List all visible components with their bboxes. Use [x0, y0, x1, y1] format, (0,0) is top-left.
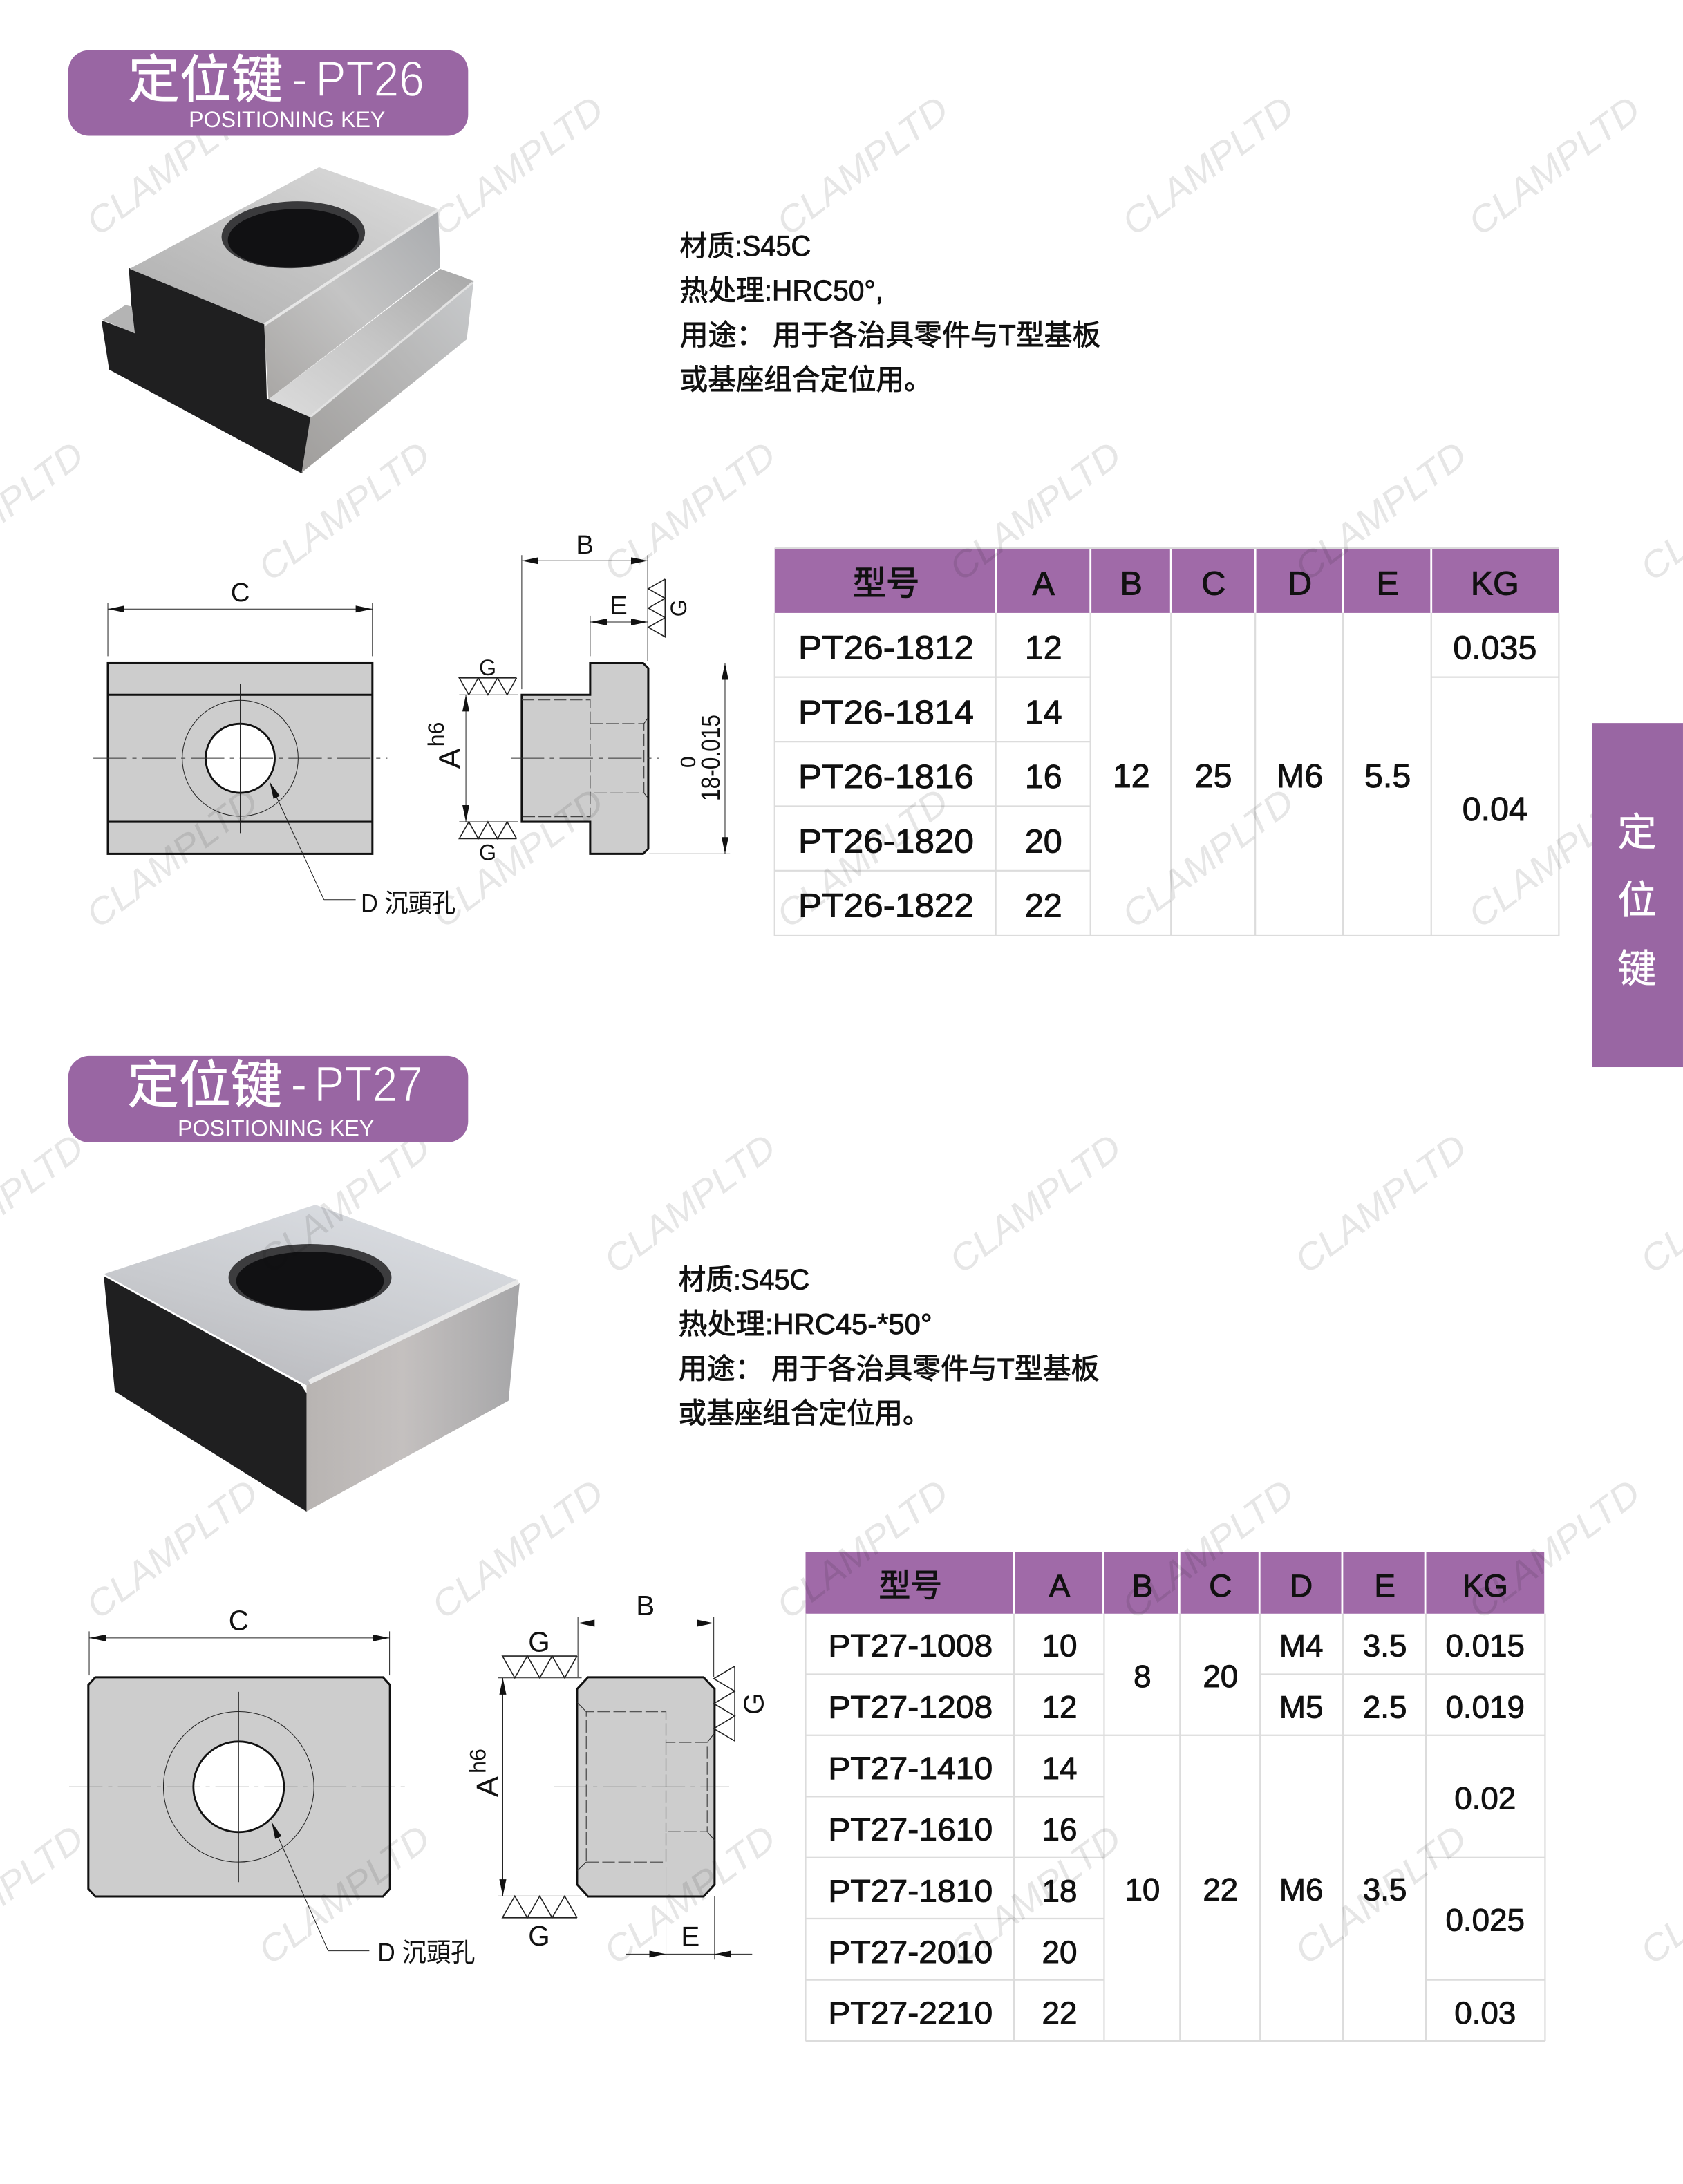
table: PT27 specifications: 20	[1042, 1934, 1077, 1970]
table: PT27 specifications: 0.015	[1445, 1628, 1525, 1664]
drawing: PT26 front view: D 沉頭孔	[361, 888, 455, 917]
watermark grid: CLAMPLTD	[251, 1818, 438, 1973]
watermark grid: CLAMPLTD	[251, 1127, 438, 1281]
side tab: 键	[1617, 947, 1657, 990]
table: PT27 specifications: 20	[1203, 1659, 1238, 1694]
drawing: PT26 side view: h6	[424, 722, 449, 746]
text block: PT26 description: 热处理:HRC50°,	[680, 274, 883, 306]
table: PT27 specifications: 2.5	[1363, 1689, 1407, 1724]
table: PT27 specifications: 22	[1042, 1995, 1077, 2031]
drawing: PT26 side view: B	[576, 530, 594, 560]
table: PT26 specifications: PT26-1820	[798, 823, 974, 860]
text block: PT26 description	[680, 230, 1100, 395]
table: PT27 specifications: M5	[1279, 1689, 1323, 1724]
table: PT26 specifications: C	[1201, 565, 1225, 603]
table: PT27 specifications: D	[1290, 1568, 1313, 1603]
watermark grid: CLAMPLTD	[596, 434, 783, 589]
drawing: PT27 side view: h6	[465, 1749, 490, 1773]
side tab: 位	[1617, 878, 1657, 921]
table: PT26 specifications: A	[1033, 565, 1055, 603]
table: PT26 specifications: 14	[1025, 694, 1062, 731]
heading banner: PT26: 定位键	[128, 50, 283, 109]
table: PT27 specifications: 10	[1042, 1628, 1077, 1664]
watermark grid: CLAMPLTD	[1115, 781, 1301, 936]
text block: PT27 description: 材质:S45C	[679, 1264, 809, 1296]
table: PT27 specifications: PT27-2210	[828, 1995, 993, 2031]
watermark grid: CLAMPLTD	[1461, 1472, 1648, 1627]
table: PT27 specifications: 12	[1042, 1689, 1077, 1724]
watermark grid: CLAMPLTD	[424, 1472, 612, 1627]
watermark grid: CLAMPLTD	[596, 1818, 783, 1973]
table: PT26 specifications: E	[1377, 565, 1399, 603]
table: PT27 specifications: E	[1374, 1568, 1395, 1603]
table: PT26 specifications: 20	[1025, 823, 1062, 860]
table: PT27 specifications: PT27-1810	[828, 1873, 993, 1908]
drawing: PT26 side view: 18-0.015	[696, 715, 726, 801]
heading banner: PT26	[68, 50, 468, 136]
drawing: PT27 side view: G	[739, 1693, 770, 1715]
table: PT27 specifications: 16	[1042, 1812, 1077, 1847]
heading banner: PT27	[68, 1055, 468, 1142]
watermark grid: CLAMPLTD	[1115, 1472, 1301, 1627]
heading banner: PT26: POSITIONING KEY	[189, 107, 385, 132]
drawing: PT26 side view: G	[479, 655, 496, 680]
table: PT26 specifications: 12	[1113, 757, 1150, 795]
drawing: PT26 side view: G	[479, 840, 496, 865]
heading banner: PT27: 定位键	[127, 1055, 282, 1113]
watermark grid: CLAMPLTD	[79, 781, 266, 936]
table: PT26 specifications: 0.04	[1463, 791, 1527, 828]
table: PT26 specifications: 5.5	[1364, 757, 1411, 795]
table: PT26 specifications: 型号	[853, 565, 919, 603]
table: PT26 specifications: KG	[1471, 565, 1519, 603]
table: PT27 specifications: M6	[1279, 1872, 1323, 1907]
watermark grid: CLAMPLTD	[424, 88, 612, 243]
watermark grid: CLAMPLTD	[942, 434, 1129, 589]
table: PT27 specifications: 3.5	[1363, 1628, 1407, 1664]
table: PT27 specifications: M4	[1279, 1628, 1323, 1664]
table: PT27 specifications	[805, 1552, 1545, 2041]
heading banner: PT26: -	[291, 51, 308, 107]
watermark grid: CLAMPLTD	[942, 1818, 1129, 1973]
table: PT26 specifications: PT26-1816	[798, 758, 974, 796]
drawing: PT26 side view: 0	[677, 756, 700, 768]
drawing: PT26 side view: E	[610, 591, 628, 621]
table: PT27 specifications: 0.025	[1445, 1903, 1525, 1938]
watermark grid: CLAMPLTD	[1461, 781, 1648, 936]
table: PT27 specifications: C	[1209, 1568, 1232, 1603]
3D model: PT26 T-slot key	[102, 167, 473, 473]
watermark grid: CLAMPLTD	[251, 434, 438, 589]
watermark grid: CLAMPLTD	[1288, 1818, 1474, 1973]
text block: PT27 description: 热处理:HRC45-*50°	[679, 1308, 932, 1340]
table: PT26 specifications: M6	[1277, 757, 1323, 795]
table: PT26 specifications: 0.035	[1453, 629, 1536, 666]
table: PT26 specifications: B	[1120, 565, 1143, 603]
side tab: 定	[1617, 811, 1657, 854]
heading banner: PT27: -	[290, 1057, 307, 1113]
drawing: PT27 side view: B	[636, 1590, 655, 1621]
table: PT27 specifications: PT27-2010	[828, 1934, 993, 1970]
watermark grid: CLAMPLTD	[1288, 1127, 1474, 1281]
watermark grid: CLAMPLTD	[769, 781, 956, 936]
table: PT27 specifications: KG	[1463, 1568, 1508, 1603]
watermark grid: CLAMPLTD	[596, 1127, 783, 1281]
text block: PT26 description: 或基座组合定位用。	[680, 364, 932, 395]
table: PT27 specifications: A	[1049, 1568, 1071, 1603]
table: PT27 specifications: PT27-1008	[828, 1628, 993, 1664]
table: PT27 specifications: 0.02	[1454, 1780, 1516, 1816]
drawing: PT26 side view: A	[433, 748, 467, 769]
drawing: PT27 front view	[69, 1605, 475, 1968]
watermark grid: CLAMPLTD	[1461, 88, 1648, 243]
text block: PT26 description: 材质:S45C	[680, 230, 811, 262]
drawing: PT27 front view: D 沉頭孔	[377, 1938, 475, 1968]
table: PT26 specifications: PT26-1822	[798, 887, 974, 924]
drawing: PT27 side view: A	[471, 1776, 505, 1797]
3D model: PT27 square key	[104, 1205, 520, 1512]
text block: PT26 description: 用途： 用于各治具零件与T型基板	[680, 319, 1100, 351]
drawing: PT27 side view: G	[528, 1921, 550, 1952]
drawing: PT26 side view: G	[666, 599, 691, 616]
table: PT26 specifications: 16	[1025, 758, 1062, 796]
heading banner: PT27: PT27	[314, 1057, 423, 1113]
table: PT27 specifications: 型号	[879, 1568, 942, 1603]
watermark grid: CLAMPLTD	[769, 88, 956, 243]
side tab	[1592, 723, 1683, 1067]
table: PT27 specifications: 0.03	[1454, 1995, 1516, 2031]
watermark grid: CLAMPLTD	[942, 1127, 1129, 1281]
table: PT26 specifications: D	[1288, 565, 1312, 603]
text block: PT27 description: 或基座组合定位用。	[679, 1397, 931, 1429]
drawing: PT27 side view	[465, 1590, 770, 1959]
table: PT27 specifications: PT27-1410	[828, 1751, 993, 1786]
table: PT27 specifications: B	[1132, 1568, 1153, 1603]
table: PT27 specifications: 10	[1125, 1872, 1160, 1907]
table: PT27 specifications: 8	[1134, 1659, 1151, 1694]
table: PT26 specifications	[775, 548, 1559, 936]
heading banner: PT26: PT26	[316, 51, 424, 107]
drawing: PT26 front view: C	[231, 578, 250, 608]
table: PT27 specifications: 0.019	[1445, 1689, 1525, 1724]
table: PT27 specifications: PT27-1208	[828, 1689, 993, 1724]
drawing: PT26 front view	[93, 578, 455, 917]
watermark grid: CLAMPLTD	[424, 781, 612, 936]
table: PT27 specifications: 22	[1203, 1872, 1238, 1907]
watermark grid: CLAMPLTD	[79, 1472, 266, 1627]
drawing: PT27 side view: E	[681, 1921, 699, 1952]
text block: PT27 description	[679, 1264, 1099, 1429]
drawing: PT27 front view: C	[229, 1605, 249, 1636]
drawing: PT26 side view	[424, 530, 730, 865]
watermark grid: CLAMPLTD	[1115, 88, 1301, 243]
watermark grid: CLAMPLTD	[769, 1472, 956, 1627]
table: PT27 specifications: 3.5	[1363, 1872, 1407, 1907]
table: PT26 specifications: 12	[1025, 629, 1062, 666]
table: PT26 specifications: 25	[1195, 757, 1232, 795]
heading banner: PT27: POSITIONING KEY	[178, 1116, 374, 1141]
table: PT26 specifications: PT26-1812	[798, 629, 974, 666]
table: PT26 specifications: PT26-1814	[798, 694, 974, 731]
watermark grid: CLAMPLTD	[1288, 434, 1474, 589]
table: PT27 specifications: 18	[1042, 1873, 1077, 1908]
drawing: PT27 side view: G	[528, 1627, 550, 1658]
watermark grid: CLAMPLTD	[79, 88, 266, 243]
table: PT27 specifications: 14	[1042, 1751, 1077, 1786]
table: PT26 specifications: 22	[1025, 887, 1062, 924]
text block: PT27 description: 用途： 用于各治具零件与T型基板	[679, 1353, 1099, 1385]
table: PT27 specifications: PT27-1610	[828, 1812, 993, 1847]
